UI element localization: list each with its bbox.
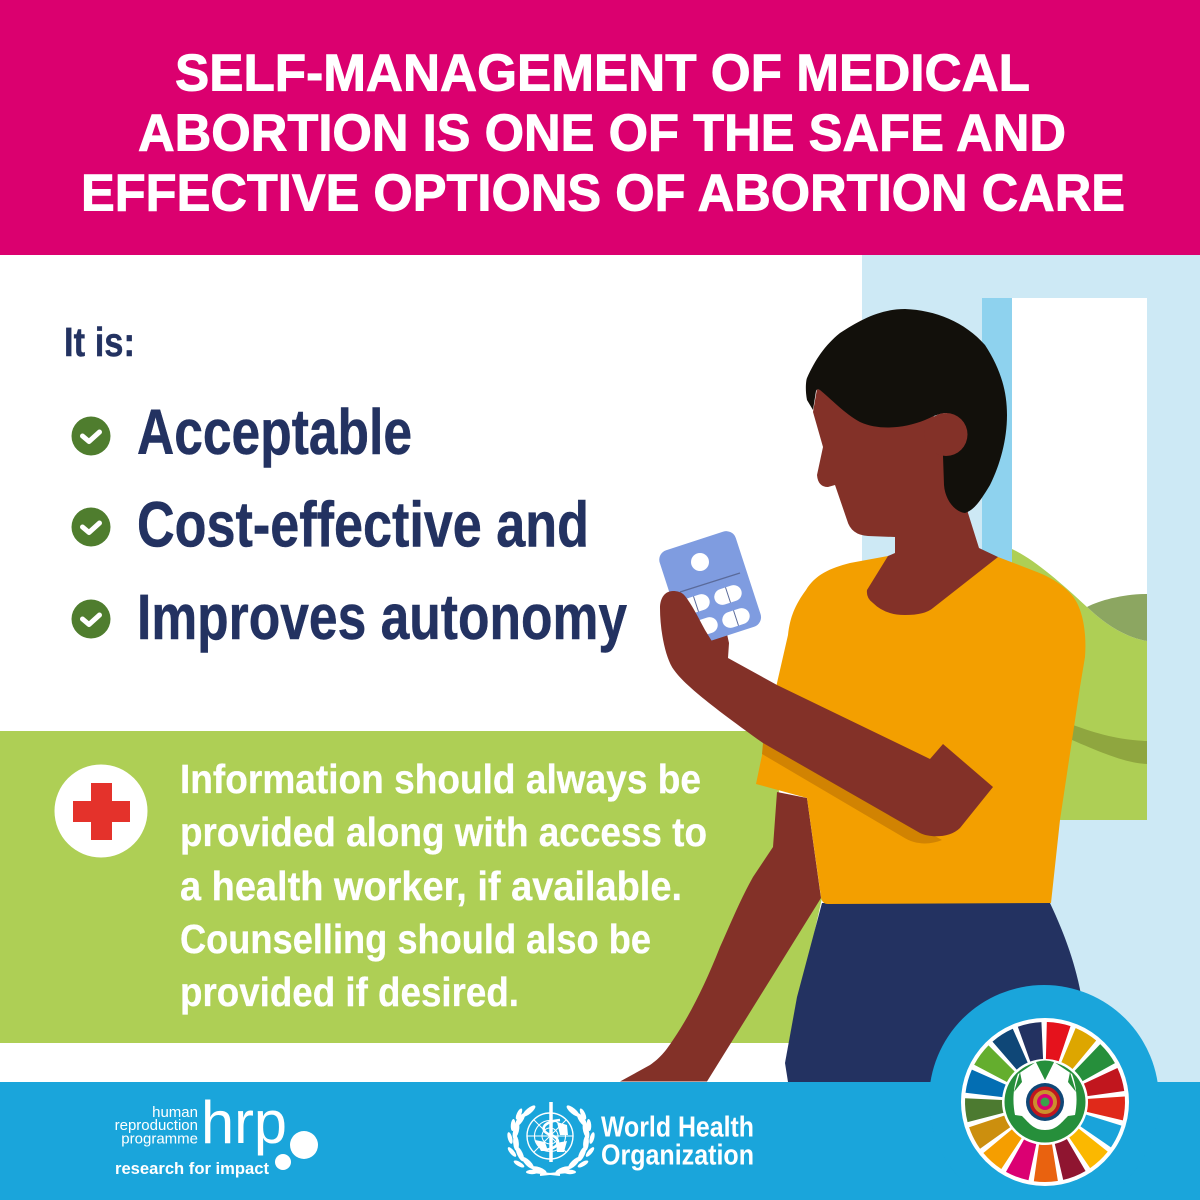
callout text: a health worker, if available. bbox=[180, 863, 682, 909]
panel: title banner: ABORTION IS ONE OF THE SAFE AND bbox=[138, 104, 1066, 162]
wordmark: World Health bbox=[601, 1112, 754, 1144]
item: acceptable bbox=[72, 396, 412, 468]
callout text: provided along with access to bbox=[180, 809, 707, 855]
panel: footer band bbox=[0, 985, 1200, 1200]
callout text bbox=[180, 756, 707, 1015]
item: cost-effective: Cost-effective and bbox=[137, 488, 589, 560]
logo: hrp bbox=[115, 1089, 318, 1178]
icon: SDG colour wheel bbox=[958, 1015, 1132, 1189]
item: acceptable: Acceptable bbox=[137, 396, 412, 468]
ear bbox=[924, 413, 968, 456]
hair bbox=[806, 309, 1007, 513]
panel: title banner bbox=[0, 0, 1200, 255]
icon: red cross bbox=[54, 764, 148, 858]
logo: hrp: reproduction bbox=[115, 1117, 198, 1134]
logo: World Health Organization bbox=[506, 1102, 754, 1175]
illustration: woman holding pill pack bbox=[620, 309, 1085, 1082]
pill pack bbox=[657, 529, 764, 648]
item: improves autonomy: Improves autonomy bbox=[137, 581, 627, 653]
skirt bbox=[785, 903, 1082, 1082]
forearm bbox=[672, 620, 993, 836]
lower arm bbox=[620, 792, 821, 1082]
shirt bbox=[756, 556, 1085, 904]
panel: information callout bbox=[0, 731, 822, 1043]
callout text: Counselling should also be bbox=[180, 916, 651, 962]
logo: hrp: research for impact bbox=[115, 1160, 270, 1178]
panel: title banner: SELF-MANAGEMENT OF MEDICAL bbox=[175, 44, 1030, 102]
logo: hrp: hrp bbox=[201, 1089, 287, 1156]
hand and fingers bbox=[660, 591, 725, 690]
callout text: Information should always be bbox=[180, 756, 701, 802]
wordmark: Organization bbox=[601, 1140, 754, 1172]
emblem bbox=[506, 1102, 596, 1175]
text: it is: It is: bbox=[64, 319, 135, 365]
head and neck bbox=[813, 389, 998, 615]
callout text: provided if desired. bbox=[180, 969, 519, 1015]
panel: title banner: EFFECTIVE OPTIONS OF ABORTION CARE bbox=[81, 164, 1125, 222]
logo: hrp: programme bbox=[121, 1130, 198, 1148]
sleeve shadow bbox=[762, 743, 942, 843]
checklist bbox=[72, 396, 627, 653]
logo: hrp: human bbox=[152, 1104, 198, 1121]
panel: window scene background bbox=[862, 255, 1200, 1085]
wordmark bbox=[601, 1112, 754, 1172]
